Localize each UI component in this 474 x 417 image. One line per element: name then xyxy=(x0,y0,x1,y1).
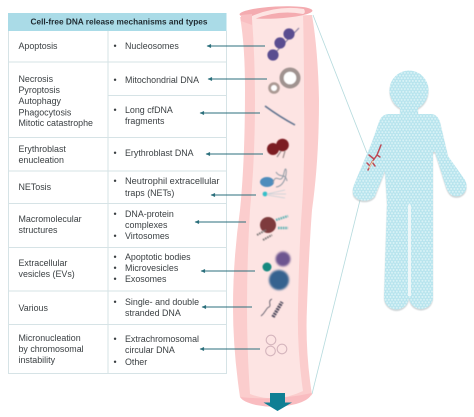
row: macromolecular xyxy=(18,209,174,241)
icon: extracellular vesicles xyxy=(262,252,290,290)
row: apoptosis xyxy=(18,41,179,51)
icon: mitochondrial DNA xyxy=(270,70,298,92)
row: various xyxy=(18,297,199,318)
icon: single- and double-stranded DNA xyxy=(261,299,282,317)
arrows from table to vessel xyxy=(195,46,267,349)
row: necrosis and related: • xyxy=(114,75,117,85)
icon: erythroblast DNA xyxy=(267,139,289,158)
panel: release mechanisms table xyxy=(8,13,226,374)
row: necrosis and related: Mitotic catastrophe xyxy=(18,118,93,128)
row: micronucleation: Micronucleation xyxy=(18,333,81,343)
row: macromolecular: complexes xyxy=(125,220,168,230)
icon: extrachromosomal circular DNA xyxy=(266,335,287,356)
vessel wall xyxy=(233,15,319,404)
row: micronucleation xyxy=(18,333,199,367)
row: micronucleation: by chromosomal xyxy=(18,344,84,354)
row: micronucleation: circular DNA xyxy=(125,345,175,355)
row: macromolecular: • xyxy=(114,231,117,241)
row: necrosis and related: Long cfDNA xyxy=(125,105,173,115)
vessel lumen xyxy=(247,13,304,398)
row: micronucleation: Other xyxy=(125,357,147,367)
row: extracellular vesicles: Exosomes xyxy=(125,274,167,284)
row: extracellular vesicles: • xyxy=(114,252,117,262)
arrow: downstream blood flow xyxy=(264,393,292,411)
icon: nucleosomes xyxy=(267,28,299,61)
icon: arm blood vessels xyxy=(367,145,381,170)
row: macromolecular: Macromolecular xyxy=(18,214,82,224)
vessel top rim xyxy=(239,5,313,25)
row: necrosis and related: Necrosis xyxy=(18,74,54,84)
row: erythroblast xyxy=(18,144,194,165)
row: necrosis and related: Mitochondrial DNA xyxy=(125,75,199,85)
row: micronucleation: Extrachromosomal xyxy=(125,334,199,344)
icon: neutrophil extracellular traps xyxy=(260,169,287,198)
row: apoptosis: Apoptosis xyxy=(18,41,58,51)
row: macromolecular: structures xyxy=(18,225,58,235)
icon: long cfDNA fragment xyxy=(265,106,295,125)
row: erythroblast: Erythroblast DNA xyxy=(125,148,194,158)
table header: Cell-free DNA release mechanisms and types xyxy=(30,16,208,26)
row: extracellular vesicles: vesicles (EVs) xyxy=(18,269,75,279)
row: macromolecular: Virtosomes xyxy=(125,231,170,241)
table header xyxy=(8,13,226,31)
row: micronucleation: • xyxy=(114,334,117,344)
row: extracellular vesicles xyxy=(18,252,191,284)
row: various: Various xyxy=(18,303,48,313)
row: NETosis: • xyxy=(114,176,117,186)
row: apoptosis: • xyxy=(114,41,117,51)
row: necrosis and related: Autophagy xyxy=(18,96,62,106)
row: extracellular vesicles: Microvesicles xyxy=(125,263,179,273)
figure shadow xyxy=(353,72,467,311)
row: NETosis xyxy=(18,176,220,198)
row: various: • xyxy=(114,297,117,307)
row: micronucleation: instability xyxy=(18,355,56,365)
row: necrosis and related: • xyxy=(114,105,117,115)
row: apoptosis: Nucleosomes xyxy=(125,41,179,51)
row: macromolecular: DNA-protein xyxy=(125,209,174,219)
row: macromolecular: • xyxy=(114,209,117,219)
row: erythroblast: enucleation xyxy=(18,155,64,165)
vessel bottom rim xyxy=(240,393,312,407)
figure body xyxy=(353,70,467,309)
row: necrosis and related: fragments xyxy=(125,116,165,126)
row: erythroblast: • xyxy=(114,148,117,158)
row: extracellular vesicles: Extracellular xyxy=(18,258,67,268)
row: extracellular vesicles: • xyxy=(114,263,117,273)
row: necrosis and related: Phagocytosis xyxy=(18,108,72,118)
zoom cone lines xyxy=(312,15,367,394)
human body figure xyxy=(353,70,467,311)
row: NETosis: Neutrophil extracellular xyxy=(125,176,220,186)
row: micronucleation: • xyxy=(114,357,117,367)
row: various: Single- and double xyxy=(125,297,199,307)
row: necrosis and related: Pyroptosis xyxy=(18,85,60,95)
row: NETosis: traps (NETs) xyxy=(125,188,174,198)
leg gap xyxy=(408,204,411,296)
row: extracellular vesicles: • xyxy=(114,274,117,284)
row: necrosis and related xyxy=(18,74,199,128)
icon: DNA-protein complexes xyxy=(257,216,288,240)
row: erythroblast: Erythroblast xyxy=(18,144,66,154)
blood vessel xyxy=(233,5,319,407)
row: NETosis: NETosis xyxy=(18,182,52,192)
row: various: stranded DNA xyxy=(125,308,181,318)
row: extracellular vesicles: Apoptotic bodies xyxy=(125,252,191,262)
